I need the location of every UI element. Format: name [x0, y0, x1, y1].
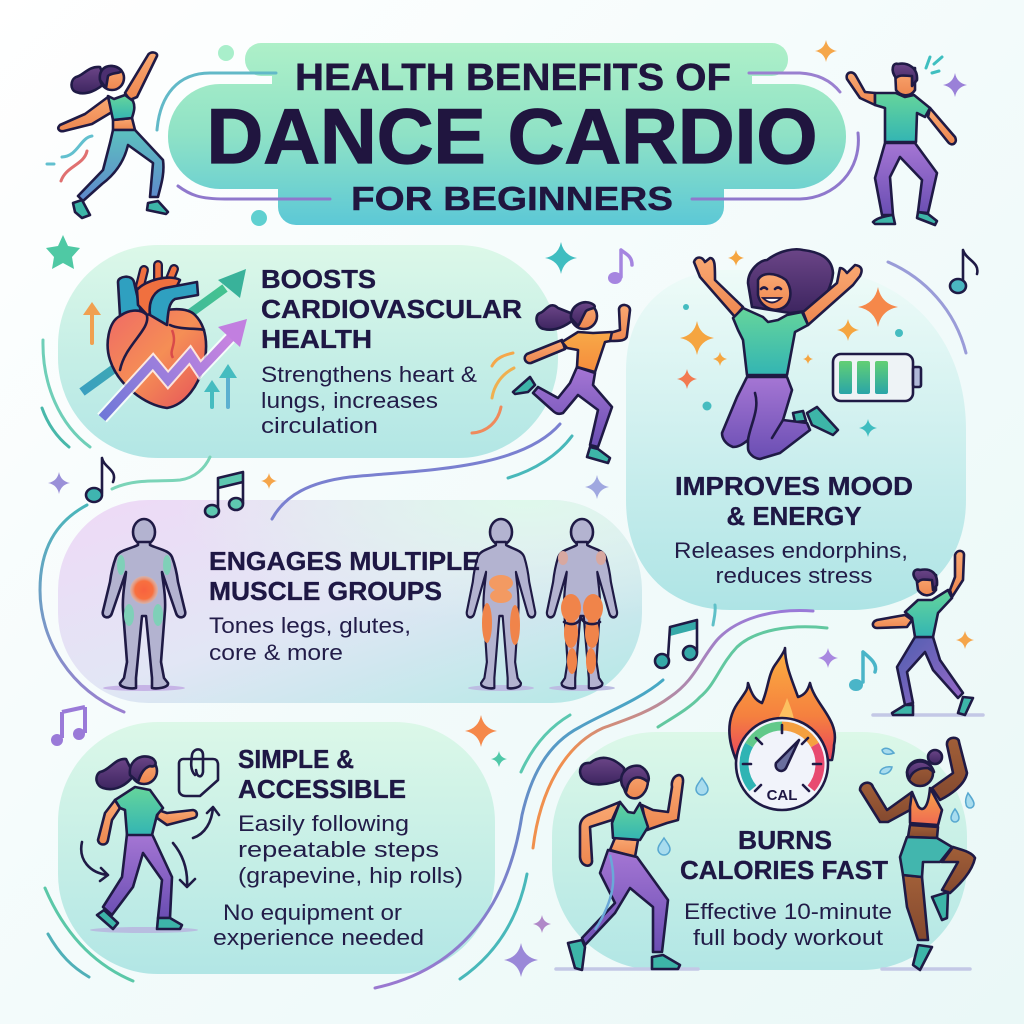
- panel: improves mood & energy: reduces stress: [716, 563, 872, 588]
- panel: boosts cardiovascular health: CARDIOVASCULAR: [261, 294, 522, 324]
- description: Releases endorphins,: [674, 538, 908, 563]
- panel: improves mood & energy: [626, 249, 966, 610]
- panel: simple & accessible: experience needed: [213, 925, 424, 950]
- description: Easily following: [238, 811, 409, 836]
- icon: running woman teal top: [556, 758, 708, 970]
- icon: stepping woman: [81, 756, 219, 933]
- icon: side body figure: [467, 519, 535, 691]
- panel: simple & accessible: (grapevine, hip rolls): [238, 863, 463, 888]
- icon: heart with rising arrows: [82, 265, 247, 418]
- panel: burns calories fast: full body workout: [693, 925, 884, 950]
- panel: boosts cardiovascular health: [58, 245, 558, 458]
- icon: running woman orange top: [472, 302, 630, 463]
- panel: boosts cardiovascular health: HEALTH: [261, 324, 372, 354]
- title: HEALTH BENEFITS OF: [295, 57, 731, 99]
- panel: simple & accessible: repeatable steps: [238, 837, 439, 862]
- icon: dancing woman orange top: [860, 738, 975, 970]
- description: Strengthens heart &: [261, 362, 477, 387]
- description: Tones legs, glutes,: [209, 613, 411, 638]
- panel: simple & accessible: [58, 722, 495, 974]
- icon: front body figure: [103, 519, 185, 691]
- icon: battery: [833, 354, 921, 401]
- icon: flame and calorie gauge: [729, 648, 835, 810]
- icon: decorative stars and notes, upper: [46, 235, 977, 353]
- icon: jumping woman: [677, 249, 903, 459]
- panel: boosts cardiovascular health: circulation: [261, 413, 378, 438]
- description: Effective 10-minute: [684, 899, 892, 924]
- icon: dancer top right: [815, 40, 967, 225]
- icon: back body figure: [547, 519, 617, 691]
- icon: dancer top left: [47, 52, 168, 218]
- panel: engages multiple muscle groups: [58, 500, 642, 703]
- icon: side dancer green top: [818, 551, 983, 715]
- decorative flowing lines and notes, middle: [40, 424, 609, 712]
- panel: simple & accessible: ACCESSIBLE: [238, 774, 406, 804]
- panel: burns calories fast: [552, 732, 967, 970]
- heading: SIMPLE &: [238, 744, 354, 774]
- icon: step tap gesture: [179, 749, 218, 796]
- panel: boosts cardiovascular health: lungs, increases: [261, 388, 438, 413]
- heading: IMPROVES MOOD: [675, 471, 913, 501]
- panel: burns calories fast: CALORIES FAST: [680, 855, 888, 885]
- heading: ENGAGES MULTIPLE: [209, 546, 480, 576]
- heading: BOOSTS: [261, 264, 376, 294]
- heading: BURNS: [738, 825, 832, 855]
- icon: flame and calorie gauge: CAL: [767, 787, 797, 804]
- title: FOR BEGINNERS: [351, 180, 673, 217]
- panel: improves mood & energy: & ENERGY: [726, 501, 862, 531]
- panel: title banner: [168, 43, 846, 226]
- title: [206, 57, 818, 217]
- arcs beside panel one: [42, 340, 90, 447]
- panel: engages multiple muscle groups: MUSCLE GROUPS: [209, 576, 442, 606]
- title swooshes: [157, 73, 858, 199]
- panel: engages multiple muscle groups: core & more: [209, 640, 343, 665]
- decorative flowing lines and notes, lower: [45, 605, 827, 988]
- panel: simple & accessible: No equipment or: [223, 900, 403, 925]
- title: DANCE CARDIO: [206, 92, 818, 180]
